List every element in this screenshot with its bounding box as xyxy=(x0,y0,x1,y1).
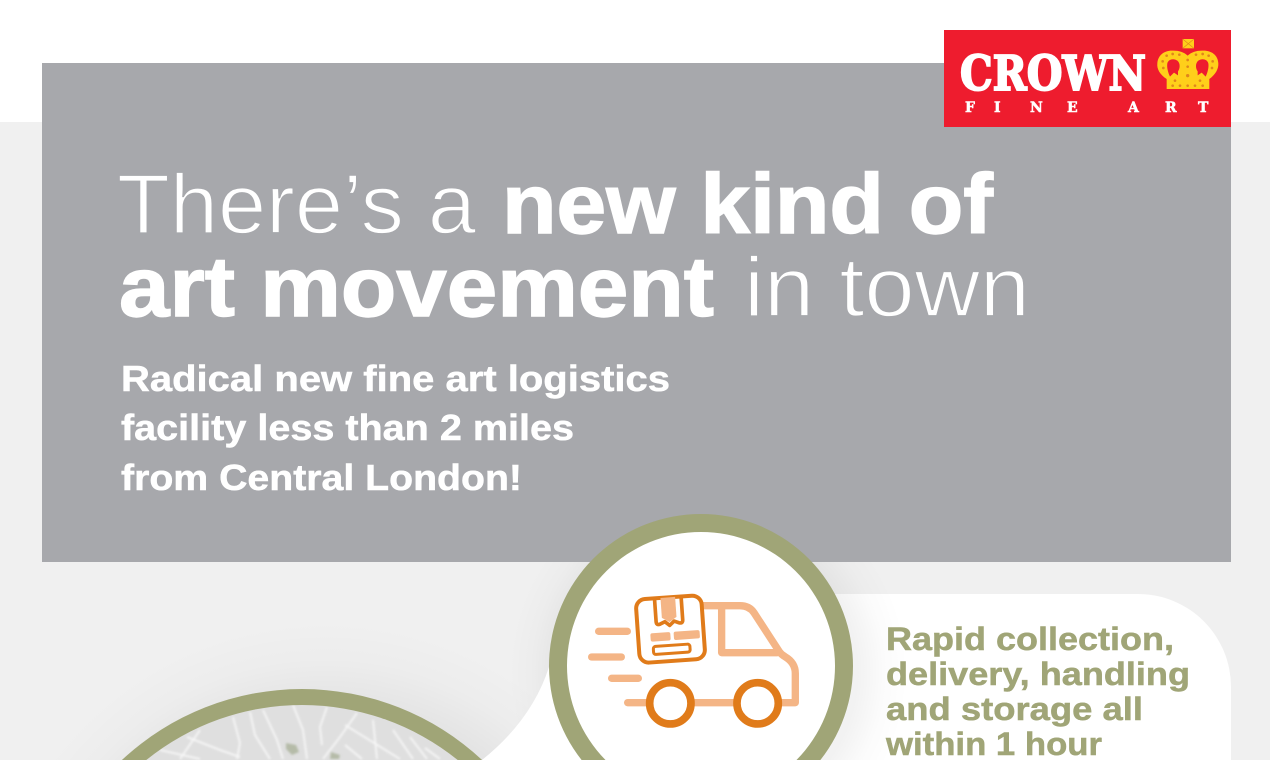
circle: marble artwork xyxy=(122,689,482,760)
parcel xyxy=(636,595,705,663)
title: new kind of xyxy=(502,157,994,251)
title: in town xyxy=(744,240,1030,334)
icon: delivery van xyxy=(592,595,795,724)
marble veins xyxy=(160,705,440,759)
subtitle xyxy=(121,358,670,498)
subtitle: from Central London! xyxy=(121,457,522,498)
header panel xyxy=(42,63,1231,562)
icon: crown xyxy=(1157,39,1218,89)
rapid collection text: delivery, handling xyxy=(886,656,1190,692)
logo: Crown Fine Art: CROWN xyxy=(960,46,1146,102)
circle: delivery van xyxy=(549,514,853,760)
rapid collection text: Rapid collection, xyxy=(886,621,1174,657)
subtitle: Radical new fine art logistics xyxy=(121,358,670,399)
wheels xyxy=(650,683,778,724)
title: There’s a xyxy=(117,157,476,251)
logo: Crown Fine Art xyxy=(944,30,1231,127)
title: art movement xyxy=(119,240,714,334)
subtitle: facility less than 2 miles xyxy=(121,407,574,448)
title xyxy=(117,157,1030,334)
pill: rapid collection xyxy=(780,594,1231,760)
rapid collection text: and storage all xyxy=(886,691,1143,727)
soft shadow behind circles xyxy=(0,562,910,760)
lower white background curve xyxy=(482,667,620,760)
logo: Crown Fine Art: FINE ART xyxy=(965,100,1209,116)
rapid collection text xyxy=(885,621,1190,760)
van body xyxy=(592,606,795,703)
